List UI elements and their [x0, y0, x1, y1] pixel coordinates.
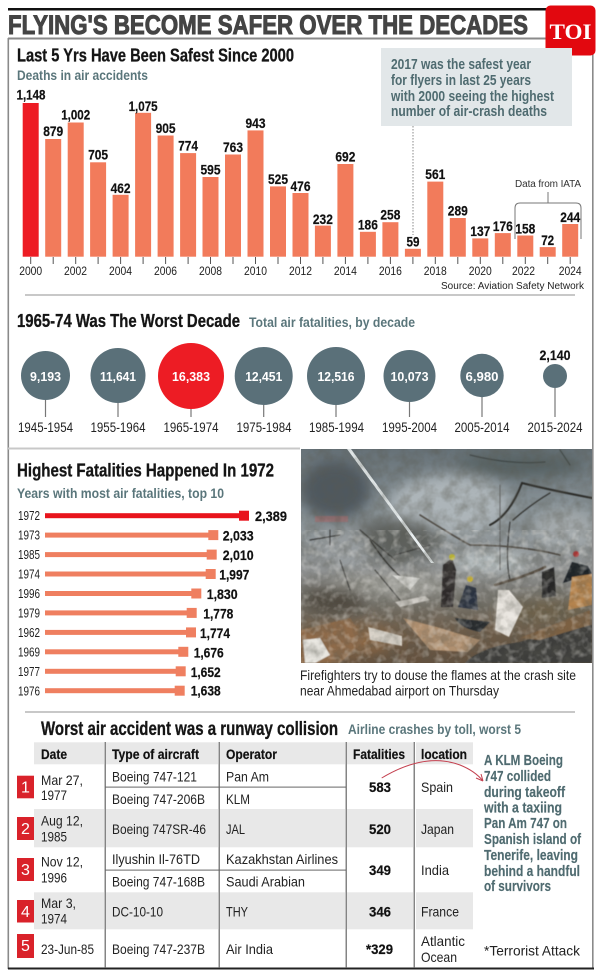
year axis labels: [19, 264, 582, 278]
bubble: 2015-2024: [528, 348, 583, 435]
row: 1976: 1976: [18, 684, 40, 698]
bar: 2012: 476: [290, 179, 311, 194]
bubble: 1945-1954: [18, 351, 73, 435]
note: KLM collision: of survivors: [484, 879, 551, 895]
callout: safest year: [381, 48, 572, 235]
bubble: 1975-1984: [235, 347, 293, 435]
row 5: Atlantic Ocean: Air India: [226, 941, 273, 957]
bubble: 1955-1964: [90, 348, 146, 435]
bar: 2005: [129, 99, 158, 257]
table header: Date: [41, 746, 67, 762]
bar: 2007: 774: [178, 138, 199, 154]
row 2: Japan: Japan: [421, 821, 454, 837]
row: 1972: 1972: [18, 509, 40, 523]
bubble: 1975-1984: 12,451: [245, 369, 282, 384]
bar: 2008: 595: [200, 162, 221, 178]
row 2: Japan: Aug 12,: [41, 813, 83, 829]
row: 1977: 1977: [18, 665, 40, 679]
note: KLM collision: A KLM Boeing: [484, 753, 563, 769]
bar: 2017: 59: [406, 234, 420, 250]
bubble: 1985-1994: [307, 347, 365, 435]
row 1: Tenerife: KLM: [226, 791, 250, 807]
bar: 2008: [200, 162, 221, 257]
icon: TOI logo: [546, 6, 596, 56]
table bands and rules: [34, 742, 473, 968]
icon: TOI logo: TOI: [550, 19, 592, 44]
row 5: Atlantic Ocean: 23-Jun-85: [41, 941, 94, 957]
heading: worst decade: 1965-74 Was The Worst Decade: [17, 311, 240, 331]
year axis labels: 2016: [379, 264, 402, 278]
bubble: 1965-1974: 16,383: [172, 369, 210, 384]
bubble: 1995-2004: [382, 350, 437, 435]
year axis labels: 2010: [244, 264, 267, 278]
year axis labels: 2008: [199, 264, 222, 278]
row 4: France: 4: [21, 904, 30, 921]
panel: fatalities by decade: [17, 311, 583, 435]
year axis labels: 2002: [64, 264, 87, 278]
row 1: Tenerife: 583: [369, 779, 391, 795]
row 1: Tenerife: Pan Am: [226, 769, 269, 785]
subheading: total fatalities: Total air fatalities, by decade: [249, 315, 415, 330]
bar: 2024: [560, 210, 581, 257]
row: 1979: 1979: [18, 606, 40, 620]
row 4: France: Mar 3,: [41, 895, 76, 911]
bar: 2014: [335, 150, 355, 257]
bar: 2005: 1,075: [129, 99, 158, 114]
bar chart: deaths per year: [16, 88, 582, 278]
arrow: from 583 to note: [382, 761, 483, 781]
bubble: 2015-2024: 2,140: [540, 348, 570, 363]
row 5: Atlantic Ocean: *329: [366, 941, 393, 957]
row: 1996: 1996: [18, 587, 40, 601]
bar: 2009: 763: [223, 140, 243, 155]
row 1: Tenerife: 1: [21, 780, 30, 796]
bubble: 1995-2004: 10,073: [390, 369, 428, 384]
year axis labels: 2018: [424, 264, 447, 278]
row 5: Atlantic Ocean: Boeing 747-237B: [112, 941, 205, 957]
note: KLM collision: with a taxiing: [483, 801, 562, 817]
row: 1979: 1,778: [203, 606, 234, 622]
bar: 2023: 72: [541, 233, 554, 248]
year axis labels: 2012: [289, 264, 312, 278]
row 4: France: THY: [226, 904, 249, 920]
year axis labels: 2004: [109, 264, 132, 278]
row 3: India: Kazakhstan Airlines: [226, 851, 338, 867]
bubble: 1965-1974: [158, 343, 224, 435]
note: KLM collision: Tenerife, leaving: [484, 848, 578, 864]
bar: 2001: [43, 124, 63, 257]
heading: last 5 years: Last 5 Yrs Have Been Safest Since 2000: [17, 46, 294, 66]
bubble: 1965-1974: 1965-1974: [164, 420, 219, 435]
table header: Type of aircraft: [112, 746, 199, 762]
year axis labels: 2014: [334, 264, 357, 278]
note: KLM collision: 747 collided: [484, 769, 551, 785]
year axis labels: 2006: [154, 264, 177, 278]
year axis labels: 2022: [512, 264, 535, 278]
bar: 2002: [61, 108, 90, 257]
bar: 2013: 232: [313, 212, 333, 227]
row 3: India: Saudi Arabian: [226, 874, 305, 890]
photo: firefighters at crash site: [295, 449, 597, 663]
bar: 2009: [223, 140, 243, 257]
row 1: Tenerife: 1977: [41, 787, 67, 803]
table header: Operator: [226, 746, 277, 762]
bar: 2003: 705: [88, 147, 109, 162]
bar: 2016: 258: [380, 208, 401, 222]
bar: 2018: 561: [425, 167, 446, 182]
panel: worst crashes table: [17, 719, 581, 968]
row 3: India: 1996: [41, 870, 67, 886]
subheading: top 10 years: Years with most air fatalities, top 10: [17, 486, 224, 501]
bar: 2015: [358, 218, 378, 257]
row 5: Atlantic Ocean: [17, 933, 465, 965]
row: 1969: [18, 646, 224, 660]
row 1: Tenerife: Boeing 747-206B: [112, 791, 205, 807]
bar: 2007: [178, 138, 199, 257]
row: 1974: 1,997: [219, 568, 249, 582]
bar: 2019: 289: [448, 204, 468, 218]
bar: 2022: 158: [515, 222, 536, 236]
water jet: [347, 449, 434, 563]
bubble: 2015-2024: 2015-2024: [528, 420, 583, 435]
row 1: Tenerife: Boeing 747-121: [112, 769, 197, 785]
panel: highest fatalities by year: [17, 460, 287, 698]
bubble: 1985-1994: 12,516: [318, 369, 354, 384]
bar: 2011: 525: [268, 172, 288, 187]
bubble: 2005-2014: 2005-2014: [454, 420, 510, 435]
row: 1972: 2,389: [255, 509, 287, 524]
note: KLM collision: behind a handful: [484, 864, 580, 880]
row 1: Tenerife: [17, 769, 453, 807]
photo texture: [301, 449, 592, 663]
bar: 2011: [268, 172, 288, 257]
row 3: India: Boeing 747-168B: [112, 874, 205, 890]
bar: 2002: 1,002: [61, 108, 90, 122]
bar: 2018: [425, 167, 446, 257]
row 2: Japan: 520: [369, 821, 391, 837]
bubble: 1975-1984: 1975-1984: [236, 420, 292, 435]
bar: 2012: [290, 179, 311, 257]
bar: 2000: [16, 88, 46, 257]
bubble: 1945-1954: 1945-1954: [18, 420, 73, 435]
row 2: Japan: 2: [21, 821, 30, 838]
row 4: France: France: [421, 904, 459, 920]
row 2: Japan: 1985: [41, 829, 67, 845]
table header: Fatalities: [353, 746, 405, 762]
bubble: 1955-1964: 1955-1964: [90, 420, 146, 435]
photo caption: [300, 667, 576, 698]
note: data from IATA bracket: [515, 179, 581, 239]
subheading: crashes by toll: Airline crashes by toll, worst 5: [348, 722, 521, 737]
row: 1979: [18, 606, 234, 622]
heading: runway collision: Worst air accident was a runway collision: [41, 719, 338, 740]
callout: safest year: 2017 was the safest year: [391, 57, 531, 73]
callout: safest year: for flyers in last 25 years: [391, 73, 531, 89]
row 4: France: [17, 895, 459, 926]
note: KLM collision: Pan Am 747 on: [484, 816, 567, 832]
bubble: 1985-1994: 1985-1994: [309, 420, 364, 435]
bar: 2001: 879: [43, 124, 63, 139]
bubble: 1945-1954: 9,193: [30, 369, 61, 384]
bar: 2003: [88, 147, 109, 257]
row 4: France: 346: [369, 904, 391, 920]
panel: deaths in air accidents: [16, 46, 585, 292]
row: 1977: [18, 665, 221, 680]
row: 1973: 2,033: [223, 528, 254, 544]
row: 1985: 2,010: [223, 548, 254, 563]
bar: 2013: [313, 212, 333, 257]
row: 1962: 1,774: [200, 626, 230, 641]
bar: 2006: 905: [156, 121, 176, 136]
bar: 2000: 1,148: [16, 88, 46, 102]
photo caption: near Ahmedabad airport on Thursday: [300, 682, 499, 698]
bar: 2022: [515, 222, 536, 257]
row: 1977: 1,652: [191, 665, 221, 680]
bar: 2010: [246, 116, 266, 257]
note: KLM collision: during takeoff: [484, 785, 565, 801]
row: 1962: [18, 626, 230, 641]
bar: 2017: [405, 234, 421, 257]
callout: safest year: with 2000 seeing the highest: [390, 89, 554, 105]
bar: 2006: [156, 121, 176, 257]
row: 1973: 1973: [18, 528, 40, 542]
row 2: Japan: JAL: [226, 821, 245, 837]
row: 1969: 1969: [18, 646, 40, 660]
bar: 2014: 692: [335, 150, 355, 164]
bubble: 1955-1964: 11,641: [100, 369, 136, 384]
row 5: Atlantic Ocean: Atlantic: [421, 933, 465, 949]
row 1: Tenerife: Mar 27,: [41, 772, 83, 788]
row: 1996: 1,830: [207, 587, 238, 602]
bar: 2019: [448, 204, 468, 257]
bubble: 1995-2004: 1995-2004: [382, 420, 437, 435]
note: data from IATA bracket: Data from IATA: [515, 179, 581, 190]
row 5: Atlantic Ocean: Ocean: [421, 949, 457, 965]
year axis labels: 2024: [559, 264, 582, 278]
bar: 2004: [111, 181, 131, 257]
table header: location: [421, 746, 467, 762]
row 3: India: 349: [369, 862, 391, 878]
subheading: deaths: Deaths in air accidents: [17, 68, 148, 83]
heading: highest fatalities: Highest Fatalities Happened In 1972: [17, 460, 274, 480]
row: 1962: 1962: [18, 626, 40, 640]
bar: 2023: [540, 233, 556, 257]
bar: 2020: [470, 224, 490, 257]
row 2: Japan: Boeing 747SR-46: [112, 821, 206, 837]
row 1: Tenerife: Spain: [421, 779, 453, 795]
row 4: France: DC-10-10: [112, 904, 163, 920]
source note: Source: Aviation Safety Network: [441, 281, 585, 292]
row 5: Atlantic Ocean: 5: [21, 938, 30, 955]
table header: [41, 746, 467, 762]
bar: 2015: 186: [358, 218, 378, 232]
row 2: Japan: [17, 813, 454, 845]
year axis labels: 2000: [19, 264, 42, 278]
bubble: 2005-2014: [454, 354, 510, 435]
row: 1976: 1,638: [191, 684, 221, 698]
note: KLM collision: [483, 753, 581, 895]
bar: 2004: 462: [111, 181, 131, 196]
footnote: terrorist attack: *Terrorist Attack: [484, 942, 581, 958]
callout: safest year: number of air-crash deaths: [391, 104, 547, 120]
bar: 2016: [380, 208, 401, 257]
row 3: India: India: [421, 862, 449, 878]
row 4: France: 1974: [41, 910, 67, 926]
row: 1973: [18, 528, 254, 544]
row: 1974: [18, 568, 249, 582]
row: 1985: [18, 548, 254, 563]
bar: 2024: 244: [560, 210, 581, 225]
bar: 2021: 176: [493, 219, 513, 234]
row: 1985: 1985: [18, 548, 40, 562]
row: 1976: [18, 684, 221, 698]
row 3: India: [17, 851, 449, 890]
bar: 2010: 943: [246, 116, 266, 131]
row: 1969: 1,676: [194, 646, 224, 660]
row 3: India: Nov 12,: [41, 854, 83, 870]
row 3: India: Ilyushin Il-76TD: [112, 851, 200, 867]
row 3: India: 3: [21, 862, 30, 879]
row: 1972: [18, 509, 287, 524]
row: 1996: [18, 587, 238, 602]
axis ticks: [30, 257, 571, 264]
bar: 2021: [493, 219, 513, 257]
row: 1974: 1974: [18, 568, 40, 582]
year axis labels: 2020: [469, 264, 492, 278]
bubble: 2005-2014: 6,980: [466, 369, 498, 384]
bar: 2020: 137: [470, 224, 490, 239]
